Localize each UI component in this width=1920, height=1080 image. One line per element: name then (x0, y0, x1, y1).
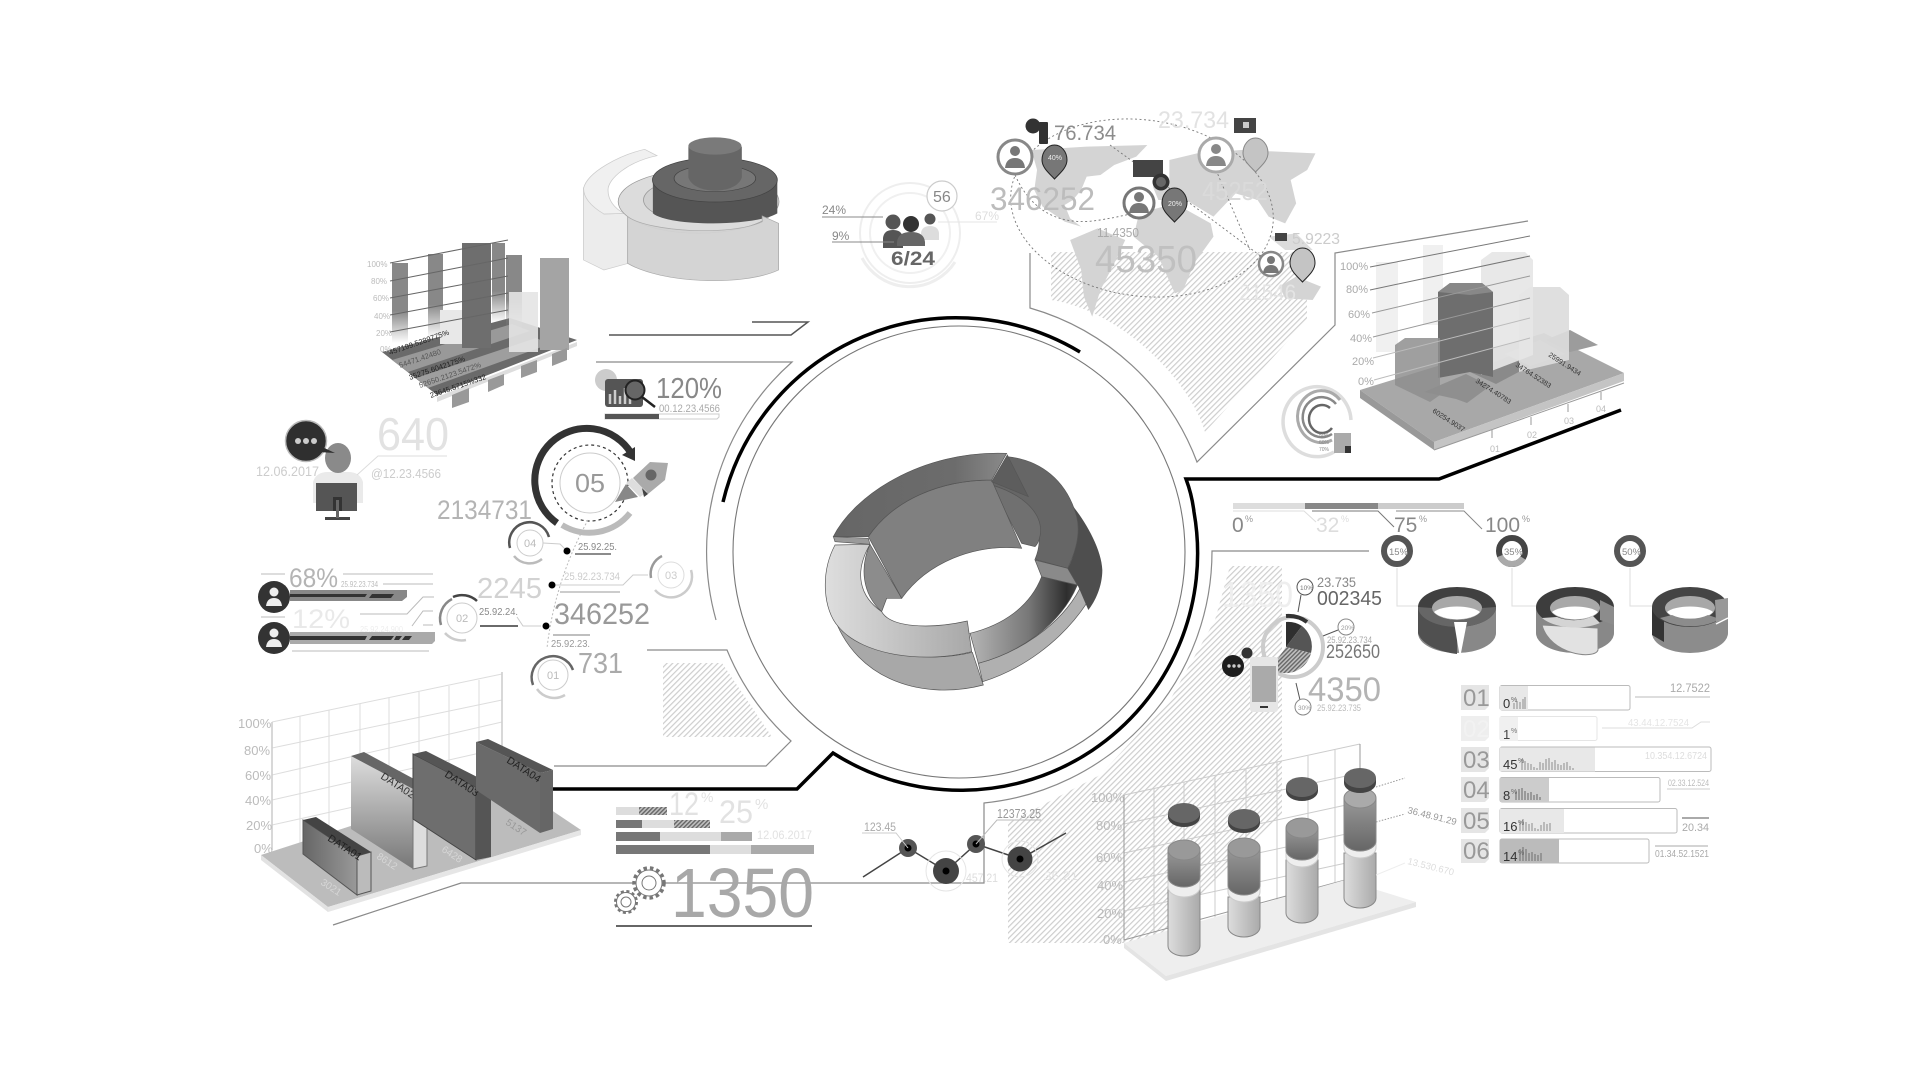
axis labels: 0% (1358, 376, 1374, 388)
phone (1250, 657, 1278, 712)
labels (822, 203, 999, 270)
stacked bars with percentages (616, 786, 814, 932)
user progress bars (258, 563, 435, 654)
axis labels: 100% (367, 260, 387, 269)
labels (862, 807, 1078, 885)
user at monitor with chat bubble (256, 408, 449, 520)
concentric radial gauge: 50% (1319, 433, 1330, 439)
chat bubble (1222, 648, 1252, 677)
concentric radial gauge: 70% (1319, 447, 1330, 453)
axis labels: 80% (244, 743, 270, 758)
x axis (1434, 383, 1624, 454)
rear bars (392, 243, 522, 343)
bar 68: 68% (289, 563, 338, 593)
callouts: 4350 (1308, 671, 1381, 709)
translucent outer segment (584, 149, 657, 270)
axis labels: 100% (1340, 261, 1368, 273)
DATA04 bar: DATA04 (504, 754, 543, 785)
bar 12: 12% (292, 604, 350, 634)
platform (261, 777, 581, 907)
DATA03 bar (413, 751, 491, 860)
platform labels: 52650.2123.5472% (418, 360, 482, 390)
ring (1263, 616, 1323, 677)
labels (256, 408, 449, 481)
callouts: 23.735 (1317, 574, 1356, 590)
data table with six rows (1461, 683, 1711, 865)
row 05 (1461, 808, 1709, 835)
labels (669, 786, 812, 842)
platform text (1431, 352, 1582, 434)
step 02: 02 (456, 613, 468, 625)
map numbers: 45350 (1095, 239, 1197, 281)
badge 50: 50% (1622, 547, 1642, 558)
labels: 123.45 (864, 820, 896, 834)
panel lines: thin frames around the centre circle (333, 221, 1528, 925)
bar 12: 25.92.24.900 (360, 625, 403, 634)
x axis: 04 (1596, 404, 1606, 414)
axis labels: 60% (373, 294, 389, 303)
row 04: 8 (1503, 788, 1510, 803)
numbers (437, 495, 650, 680)
bars (1395, 252, 1569, 402)
wall grid (272, 672, 502, 850)
row 06: 01.34.52.1521 (1655, 849, 1709, 860)
step 03: 03 (665, 570, 677, 582)
lines (261, 574, 434, 651)
6/24 team widget (822, 181, 999, 287)
chart icon (605, 379, 643, 407)
platform text: 34274.40783 (1474, 378, 1512, 406)
base (1124, 880, 1416, 976)
labels: 24% (822, 203, 846, 217)
numbers: 731 (578, 648, 623, 680)
column 1 (1168, 803, 1200, 956)
faint back bars (1376, 245, 1443, 352)
axis labels: 20% (1097, 906, 1123, 921)
row 01: 12.7522 (1670, 683, 1710, 695)
step 04 (509, 522, 617, 563)
DATA04 bar (476, 739, 553, 833)
world map with markers (990, 102, 1340, 317)
platform text: 34764.52383 (1514, 362, 1552, 390)
DATA01 bar: DATA01 (325, 832, 364, 863)
percentage badges with 3D rings (1384, 538, 1728, 658)
bar 68: 25.92.23.734 (341, 580, 378, 589)
axis labels: 40% (1350, 333, 1372, 345)
badge 15 (1384, 538, 1410, 564)
axis labels (1091, 790, 1125, 947)
labels: 6/24 (891, 249, 936, 270)
row 04: % (1511, 789, 1517, 796)
centre circle with thick arcs (547, 318, 1621, 790)
callouts: 10% (1300, 585, 1313, 592)
axis labels: 80% (371, 277, 387, 286)
map numbers: 11.4350 (1097, 225, 1139, 240)
concentric radial gauge: 60% (1319, 440, 1330, 446)
value labels: 5137 (503, 817, 528, 839)
row 06: % (1518, 850, 1524, 857)
numbers: 25.92.23. (551, 638, 590, 650)
DATA02 bar (351, 752, 427, 869)
callouts: 30% (1298, 705, 1311, 712)
value labels (318, 817, 528, 899)
labels on platform (1424, 330, 1598, 403)
line chart (862, 807, 1078, 891)
people icon (883, 214, 939, 248)
column 4 (1344, 768, 1376, 908)
labels: 12373.25 (997, 807, 1041, 821)
platform text: 25991.9434 (1547, 352, 1582, 378)
callouts: 002345 (1317, 588, 1382, 610)
labels: 12 (669, 786, 699, 822)
row 01: 0 (1503, 696, 1510, 711)
loading progress bar: % (1522, 514, 1530, 524)
map numbers: 346252 (990, 181, 1095, 217)
badge 15: 15% (1389, 547, 1409, 558)
axis labels: 40% (374, 312, 390, 321)
map numbers: 45252 (1202, 176, 1268, 206)
badge 35: 35% (1504, 547, 1524, 558)
row 02: % (1511, 728, 1517, 735)
progress (605, 414, 719, 419)
axis labels (238, 716, 273, 856)
date: 00.12.23.4566 (659, 403, 720, 415)
badge 35 (1499, 538, 1525, 564)
platform labels: 457199.5289775% (388, 328, 451, 357)
value labels: 3021 (318, 877, 343, 899)
bar 68 (258, 563, 407, 613)
labels: % (701, 789, 713, 805)
labels: 12.06.2017 (757, 828, 812, 842)
value labels: 8612 (374, 851, 399, 873)
step 04: 04 (524, 538, 536, 550)
3D bar chart top-left (367, 240, 577, 408)
markers (899, 835, 1038, 891)
step 01 (532, 656, 573, 698)
3D bar chart bottom-left (238, 672, 581, 912)
bars (616, 807, 814, 854)
loading progress bar: % (1341, 514, 1349, 524)
rocket milestone 05 (535, 428, 668, 533)
column 3 (1286, 777, 1318, 923)
axis labels: 0% (380, 345, 392, 354)
mid ring (618, 170, 779, 233)
pie cluster with phone (1222, 574, 1382, 715)
pins: 20% (1168, 201, 1182, 208)
milestone path (437, 495, 692, 698)
axis labels: 80% (1346, 284, 1368, 296)
hatched background areas (663, 252, 1307, 943)
axis labels: 100% (238, 716, 272, 731)
callouts (1295, 574, 1382, 715)
numbers: 346252 (554, 598, 650, 631)
map numbers: 76.734 (1054, 122, 1116, 145)
labels: 12.06.2017 (256, 464, 319, 479)
row 05: 20.34 (1682, 822, 1709, 834)
row 02: 1 (1503, 727, 1510, 742)
row 05: 05 (1463, 808, 1490, 835)
platform labels: 23645.5715%332 (429, 372, 487, 400)
loading progress bar: 75 (1394, 514, 1417, 537)
callouts: 252650 (1326, 642, 1380, 663)
concentric radial gauge (1283, 387, 1351, 457)
pins (1042, 138, 1315, 282)
rings (860, 183, 960, 287)
continents (1032, 145, 1321, 317)
pie slices (1270, 622, 1312, 673)
axis labels: 40% (1097, 878, 1123, 893)
central 3D ring chart (825, 453, 1102, 690)
row 03: 03 (1463, 747, 1490, 774)
axis labels: 80% (1096, 818, 1122, 833)
axis labels: 20% (246, 818, 272, 833)
chat bubble (286, 420, 335, 462)
platform labels: 35275.6042175% (408, 354, 467, 382)
120% analytics widget (595, 369, 722, 419)
row 02 (1461, 716, 1710, 743)
platform (1360, 333, 1624, 442)
bar 12 (258, 604, 435, 654)
callouts: 25.92.23.735 (1317, 703, 1361, 714)
dark ring (652, 158, 777, 223)
rocket milestone 05: 05 (575, 468, 605, 498)
labels: @12.23.4566 (371, 466, 441, 481)
grid lines (1370, 236, 1530, 380)
dotted route ellipses (999, 102, 1285, 314)
row 01: % (1511, 697, 1517, 704)
axis labels: 60% (1096, 850, 1122, 865)
top cylinder stack (584, 137, 779, 281)
labels: 35.21 (1044, 869, 1078, 883)
labels: 457.21 (966, 871, 998, 885)
person markers (998, 138, 1283, 276)
row 03: % (1518, 758, 1524, 765)
front translucent wall (628, 216, 779, 281)
axis labels: 60% (245, 768, 271, 783)
loading progress bar: % (1245, 514, 1253, 524)
row 06: 14 (1503, 849, 1517, 864)
loading progress bar: % (1419, 514, 1427, 524)
badge 50 (1617, 538, 1643, 564)
platform text: 60254.9037 (1431, 408, 1466, 434)
row 04 (1461, 777, 1710, 804)
DATA03 bar: DATA03 (442, 768, 481, 799)
step 03 (548, 556, 692, 597)
axis labels (1340, 261, 1374, 388)
map numbers: 23.734 (1158, 107, 1229, 134)
x axis: 01 (1490, 444, 1500, 454)
row 03: 45 (1503, 757, 1517, 772)
DATA01 bar (303, 817, 371, 895)
column 2 (1228, 809, 1260, 937)
platform (382, 318, 577, 395)
3D ring 1 (1418, 587, 1496, 658)
step 02 (440, 595, 550, 640)
front bars (440, 243, 569, 352)
platform labels (388, 328, 487, 400)
row 01 (1461, 683, 1710, 712)
numbers: 2134731 (437, 495, 532, 525)
inner cylinder (688, 137, 742, 191)
tick bars (452, 348, 567, 408)
row 01: 01 (1463, 685, 1490, 712)
callouts: 20% (1341, 625, 1354, 632)
3D ring 3 (1652, 587, 1728, 653)
grid lines (390, 240, 508, 332)
value: 120% (656, 373, 722, 405)
row 02: 43.44.12.7524 (1628, 718, 1689, 729)
1350: 1350 (671, 854, 814, 932)
cylinder chart (1091, 744, 1458, 981)
row 05: % (1518, 820, 1524, 827)
step 04: 25.92.25. (578, 541, 617, 553)
gears (616, 868, 664, 912)
platform labels: 54471.42480 (398, 347, 442, 370)
axis labels: 100% (1091, 790, 1125, 805)
row 06 (1461, 838, 1709, 865)
axis labels: 20% (1352, 356, 1374, 368)
labels: 25 (719, 794, 753, 830)
wall grid (1124, 744, 1360, 940)
map numbers: 21546 (1239, 280, 1296, 305)
step 01: 01 (547, 670, 559, 682)
axis labels (367, 260, 392, 354)
axis labels: 20% (376, 329, 392, 338)
x axis: 03 (1564, 416, 1574, 426)
labels: 9% (832, 229, 850, 243)
3D bar chart top-right (1340, 236, 1624, 454)
row 04: 04 (1463, 777, 1490, 804)
axis labels: 0% (1103, 932, 1122, 947)
3D ring 2 (1536, 587, 1614, 655)
row 03 (1461, 747, 1711, 774)
step 02: 25.92.24. (479, 606, 518, 618)
connectors (1397, 568, 1652, 606)
loading progress bar: 0 (1232, 514, 1244, 537)
pins: 40% (1048, 155, 1062, 162)
leader labels: 36.48.91.29 (1406, 805, 1458, 828)
labels: % (755, 796, 768, 813)
magnifier (626, 380, 655, 407)
numbers: 2245 (477, 573, 542, 605)
labels: 67% (975, 209, 999, 223)
loading progress bar: 32 (1316, 514, 1339, 537)
faint number: 1350 (1222, 574, 1293, 615)
map numbers (990, 107, 1340, 305)
DATA02 bar: DATA02 (378, 770, 417, 801)
map numbers: 5.9223 (1292, 231, 1340, 248)
x axis: 02 (1527, 430, 1537, 440)
row 05: 16 (1503, 819, 1517, 834)
row 03: 10.354.12.6724 (1645, 751, 1707, 762)
labels: 640 (377, 408, 449, 460)
step 03: 25.92.23.734 (564, 571, 620, 583)
gear bubble (595, 369, 617, 391)
axis labels: 60% (1348, 309, 1370, 321)
leader labels: 13.530.670 (1406, 856, 1455, 878)
axis labels: 0% (254, 841, 273, 856)
callouts: 25.92.23.734 (1327, 635, 1372, 646)
56 bubble (927, 181, 957, 211)
value labels: 6428 (439, 844, 464, 866)
rocket (615, 462, 668, 502)
row 06: 06 (1463, 838, 1490, 865)
row 04: 02.33.12.524 (1668, 778, 1709, 788)
small device icons (1026, 118, 1287, 241)
loading progress bar: 100 (1485, 514, 1520, 537)
loading progress bar (1232, 503, 1530, 537)
leader labels (1376, 778, 1458, 878)
row 02: 02 (1463, 716, 1490, 743)
axis labels: 40% (245, 793, 271, 808)
56 bubble: 56 (933, 189, 951, 206)
